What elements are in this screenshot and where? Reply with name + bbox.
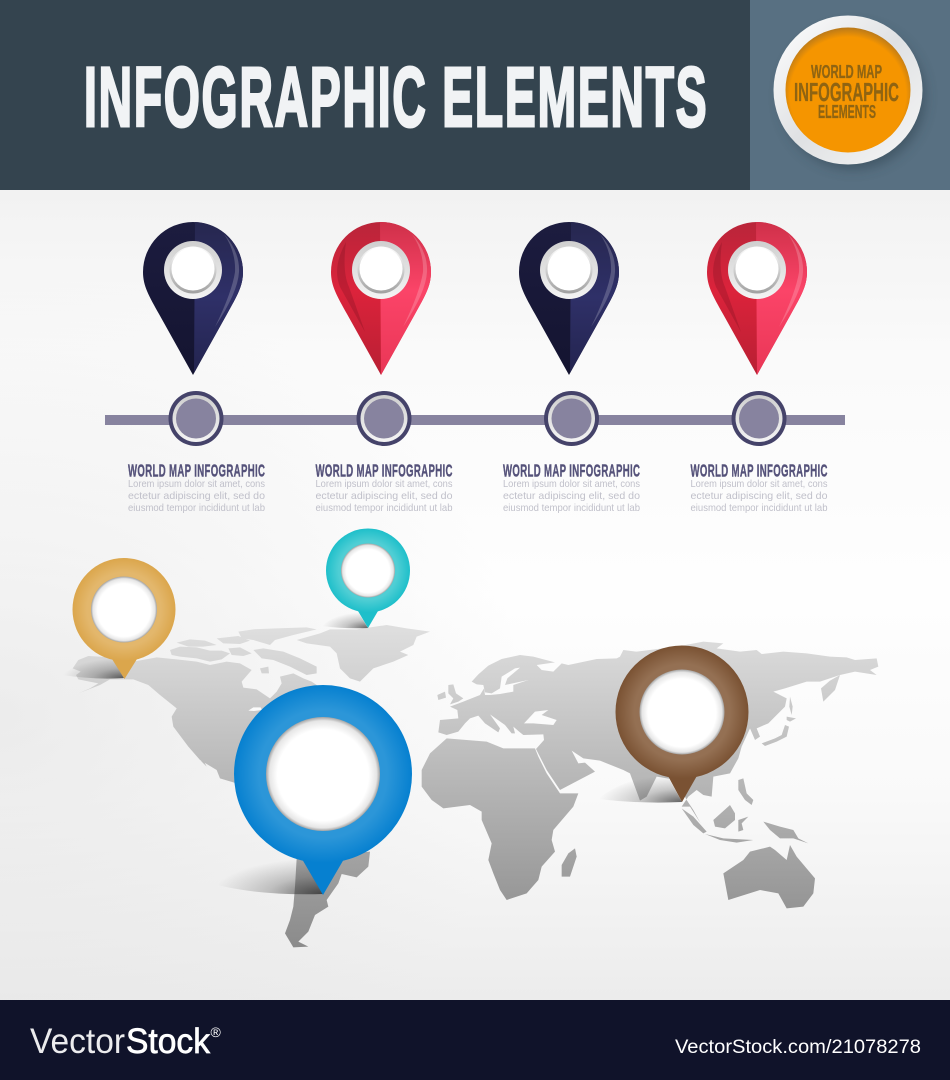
- timeline node 1: [168, 391, 224, 446]
- timeline node 2: [356, 391, 412, 446]
- pin: red 2: [707, 222, 807, 375]
- badge: world map infographic elements: [774, 16, 925, 169]
- header right panel: [750, 0, 950, 190]
- title: INFOGRAPHIC ELEMENTS: [84, 52, 707, 145]
- text block 2: ectetur adipiscing elit, sed do: [316, 490, 453, 502]
- text block 3: WORLD MAP INFOGRAPHIC: [503, 460, 640, 480]
- text block 4: WORLD MAP INFOGRAPHIC: [690, 460, 827, 480]
- badge text: [794, 62, 899, 122]
- timeline node 3: [544, 391, 599, 446]
- footer logo: [30, 1022, 222, 1061]
- text block 3: ectetur adipiscing elit, sed do: [503, 490, 640, 502]
- map: kamchatka and japan: [762, 675, 840, 746]
- text block 4: Lorem ipsum dolor sit amet, cons: [690, 478, 828, 490]
- text block 1: [128, 460, 265, 514]
- text block 2: WORLD MAP INFOGRAPHIC: [316, 460, 452, 480]
- pin: navy 1: [143, 222, 243, 375]
- pin: red 1: [331, 222, 431, 375]
- timeline node 4: [732, 391, 786, 446]
- text block 2: eiusmod tempor incididunt ut lab: [316, 502, 453, 514]
- text block 3: eiusmod tempor incididunt ut lab: [503, 502, 640, 514]
- text block 3: Lorem ipsum dolor sit amet, cons: [503, 478, 640, 490]
- text block 2: Lorem ipsum dolor sit amet, cons: [316, 478, 452, 490]
- footer logo: Vector: [30, 1022, 125, 1061]
- text block 4: eiusmod tempor incididunt ut lab: [690, 502, 828, 514]
- timeline bar: [105, 415, 845, 425]
- page background: [0, 190, 950, 1000]
- text block 4: [690, 460, 828, 514]
- map pin: teal: [326, 528, 410, 628]
- header left panel: [0, 0, 750, 190]
- map pin: brown: [616, 646, 748, 802]
- text block 1: eiusmod tempor incididunt ut lab: [128, 502, 265, 514]
- pin: navy 2: [519, 222, 619, 375]
- footer logo: Stock: [126, 1022, 210, 1061]
- timeline: [105, 391, 845, 446]
- map pin: gold: [72, 558, 176, 679]
- world map: [73, 625, 878, 947]
- map: arctic islands and greenland: [170, 625, 430, 682]
- map: africa, eurasia and oceania: [422, 642, 878, 908]
- map: south america: [285, 852, 370, 947]
- map: alaska and north america: [73, 656, 327, 793]
- text block 2: [316, 460, 453, 514]
- header banner: [0, 0, 950, 190]
- text block 3: [503, 460, 640, 514]
- footer url: VectorStock.com/21078278: [675, 1037, 921, 1058]
- footer logo: ®: [210, 1024, 222, 1040]
- footer bar: [0, 1000, 950, 1080]
- text block 1: ectetur adipiscing elit, sed do: [128, 490, 265, 502]
- pin shadows: [62, 612, 682, 894]
- text block 1: Lorem ipsum dolor sit amet, cons: [128, 478, 265, 490]
- badge text: WORLD MAP: [811, 62, 882, 82]
- badge text: ELEMENTS: [818, 102, 876, 122]
- map pin: blue: [234, 685, 412, 895]
- text block 4: ectetur adipiscing elit, sed do: [690, 490, 828, 502]
- text block 1: WORLD MAP INFOGRAPHIC: [128, 460, 265, 480]
